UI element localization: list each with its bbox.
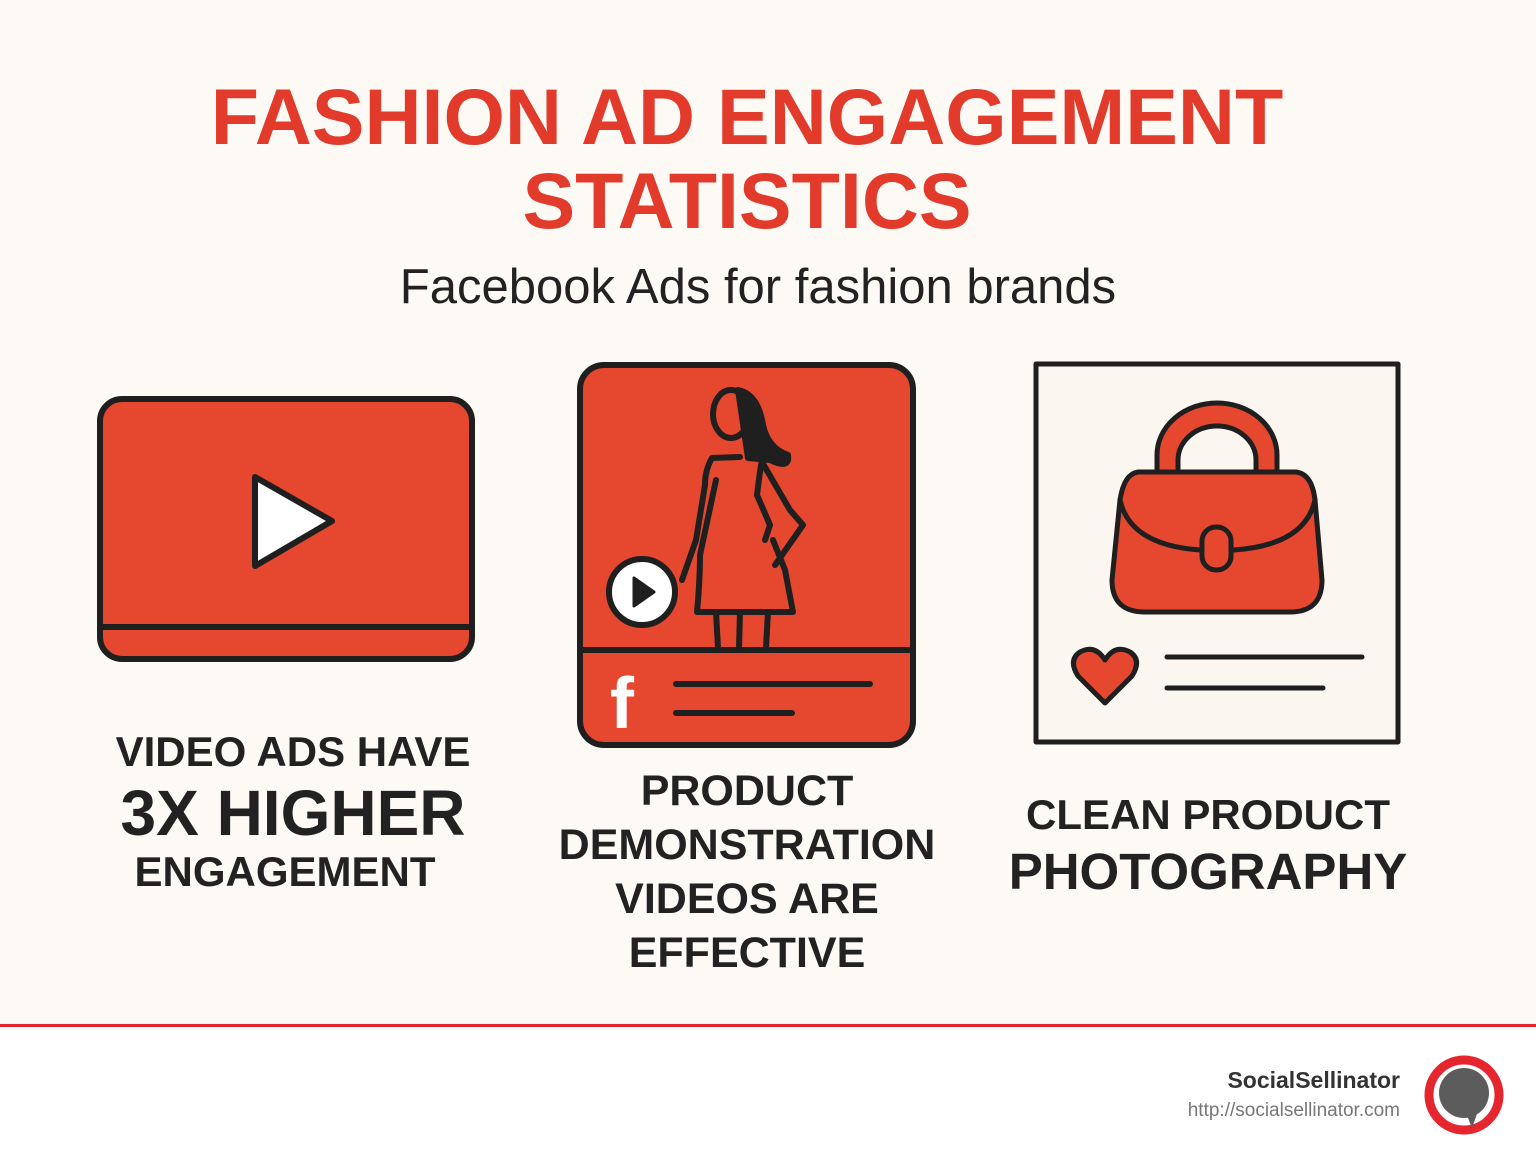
text: video ads: 3X HIGHER [121, 777, 465, 849]
text: video ads: VIDEO ADS HAVE [116, 728, 470, 775]
title: FASHION AD ENGAGEMENT [211, 72, 1283, 161]
brand text [1188, 1067, 1400, 1121]
text: clean photography: CLEAN PRODUCT [1026, 791, 1390, 838]
brand text: http://socialsellinator.com [1188, 1100, 1400, 1121]
footer [0, 1024, 1536, 1157]
brand text: SocialSellinator [1227, 1067, 1400, 1093]
text: clean photography: PHOTOGRAPHY [1009, 843, 1407, 900]
title: STATISTICS [522, 156, 972, 245]
title [211, 72, 1283, 245]
text: product demo: PRODUCT [641, 767, 853, 815]
subtitle: Facebook Ads for fashion brands [400, 260, 1116, 314]
icon: facebook video ad with woman: f [610, 664, 635, 744]
text: product demo: DEMONSTRATION [559, 821, 935, 869]
text: video ads [116, 728, 470, 895]
text: video ads: ENGAGEMENT [134, 848, 436, 895]
logo [1424, 1056, 1504, 1134]
text: clean photography [1009, 791, 1407, 900]
text: product demo: EFFECTIVE [629, 929, 865, 977]
text: product demo: VIDEOS ARE [615, 875, 879, 923]
text: product demo [559, 767, 935, 977]
